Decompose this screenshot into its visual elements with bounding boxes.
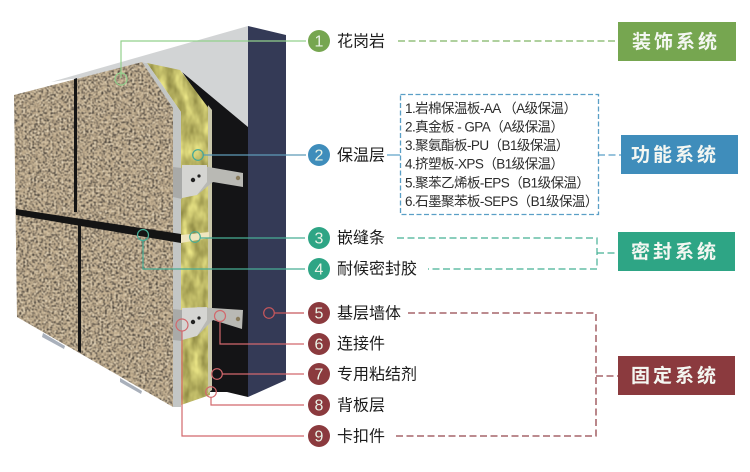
illustration: wall cross-section [10, 26, 286, 410]
connector: sealing [397, 238, 618, 269]
item 5: 基层墙体 [337, 304, 401, 322]
connector: function [387, 154, 621, 156]
leader line 6 [214, 310, 304, 344]
item 4 [308, 258, 417, 280]
tag: decoration system [618, 22, 736, 61]
item 9: 9 [315, 428, 324, 446]
item 1: 1 [315, 34, 324, 50]
insulation options box: 3.聚氨酯板-PU（B1级保温） [405, 138, 569, 153]
item 1 [308, 30, 385, 52]
panel joints [16, 78, 181, 353]
leader line 7 [212, 369, 304, 379]
insulation options box: 5.聚苯乙烯板-EPS（B1级保温） [405, 176, 589, 190]
item 4: 耐候密封胶 [337, 260, 417, 278]
leader line 9 [176, 319, 304, 436]
tag: sealing system [618, 232, 735, 271]
connector: fixing [395, 313, 618, 436]
item 3 [308, 227, 385, 249]
item 3: 3 [315, 230, 324, 248]
bracket upper [173, 165, 243, 199]
item 2: 保温层 [337, 146, 385, 164]
insulation layer [147, 63, 210, 405]
insulation options box [400, 94, 598, 214]
tag: sealing system: 密封系统 [631, 240, 719, 263]
leader line 3 [190, 232, 305, 242]
item 2: 2 [315, 148, 324, 164]
tag: fixing system [618, 356, 735, 395]
insulation options box: 6.石墨聚苯板-SEPS（B1级保温） [405, 194, 598, 209]
leader line 1 [115, 41, 306, 85]
granite panels [10, 60, 176, 410]
tag: decoration system: 装饰系统 [632, 30, 720, 53]
base wall [248, 26, 286, 397]
connector: decoration [398, 40, 618, 42]
item 5: 5 [315, 306, 324, 322]
insulation options box: 4.挤塑板-XPS（B1级保温） [405, 156, 563, 172]
item 7: 专用粘结剂 [337, 366, 417, 384]
item 4: 4 [315, 262, 324, 278]
item 8: 背板层 [337, 396, 385, 414]
backing board [140, 62, 181, 407]
tag: function system [621, 135, 738, 174]
item 6 [308, 333, 385, 355]
insulation options box: 2.真金板 - GPA（A级保温） [405, 120, 563, 134]
adhesive layer [182, 72, 248, 397]
top gray surface [51, 26, 248, 127]
item 6: 连接件 [337, 335, 385, 353]
leader line 5 [264, 308, 304, 318]
item 9: 卡扣件 [337, 428, 385, 446]
item 3: 嵌缝条 [337, 229, 385, 247]
leader line 2 [193, 150, 306, 160]
item 9 [308, 425, 385, 447]
bottom clips [42, 333, 65, 349]
item 1: 花岗岩 [337, 32, 385, 50]
item 8: 8 [315, 398, 324, 414]
leader line 8 [206, 387, 304, 405]
leader line 4 [138, 230, 305, 269]
item 7 [308, 363, 417, 385]
item 5 [308, 302, 401, 324]
item 2 [308, 144, 385, 166]
tag: fixing system: 固定系统 [631, 364, 719, 387]
item 8 [308, 394, 385, 416]
bracket lower [173, 307, 243, 341]
tag: function system: 功能系统 [631, 143, 719, 166]
item 7: 7 [315, 366, 324, 384]
sealing strip [181, 232, 209, 243]
item 6: 6 [315, 336, 324, 354]
insulation options box: 1.岩棉保温板-AA （A级保温） [405, 101, 576, 116]
